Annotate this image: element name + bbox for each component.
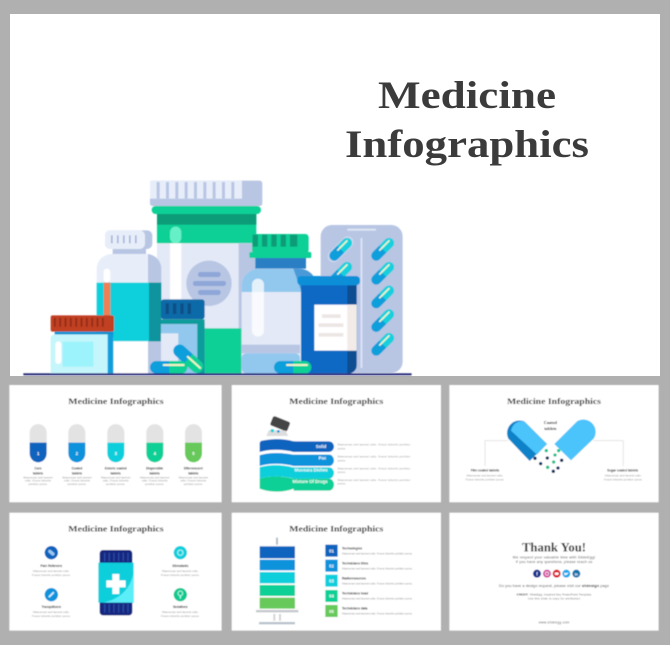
social icons xyxy=(533,570,580,578)
icon: medicine bottle with cross xyxy=(98,550,134,615)
feature captions xyxy=(32,564,200,618)
stack descriptions: purus. xyxy=(338,470,346,474)
icon: blister pack xyxy=(321,225,403,373)
icon: small blue jar xyxy=(161,299,205,373)
step 02: Technicians titles xyxy=(342,561,368,565)
right caption xyxy=(604,469,643,481)
step 01: 01 xyxy=(329,548,334,553)
step 04: Maecenas sed laoreet odio. Fusce lobortis porttitor purus. xyxy=(342,597,413,601)
message: We respect your valuable time with SlideEgg! xyxy=(513,555,595,559)
feature captions: Pain Relievers xyxy=(41,564,62,568)
icon: loose capsules xyxy=(150,342,311,375)
feature captions: Sedatives xyxy=(173,605,188,609)
icon: sedatives xyxy=(174,588,187,601)
stack descriptions: purus. xyxy=(338,482,346,486)
icon: syringe xyxy=(256,538,298,624)
capsule 2: 2 xyxy=(76,451,79,456)
feature captions: Maecenas sed laoreet odio. xyxy=(162,569,199,573)
capsule label: Coated xyxy=(544,420,558,425)
step 05 xyxy=(325,605,413,617)
icon: stimulants xyxy=(174,546,187,559)
connector lines xyxy=(485,441,623,466)
step 01: Technologies xyxy=(342,546,362,550)
left caption: Maecenas sed laoreet odio. xyxy=(467,474,503,478)
panel: stacked bottle slide xyxy=(232,385,441,502)
capsule 1: 1 xyxy=(37,451,40,456)
capsule captions: Dispersible xyxy=(146,467,163,471)
social icons: in xyxy=(575,572,578,576)
stack: dark blue layer: Solid xyxy=(316,444,327,449)
icon: red lid jar xyxy=(51,315,114,373)
step 02: 02 xyxy=(329,563,334,568)
icon: teal bottle xyxy=(97,230,161,373)
panel: cover slide xyxy=(10,14,660,376)
feature captions: Stimulants xyxy=(172,564,189,568)
step 05: Maecenas sed laoreet odio. Fusce lobortis porttitor purus. xyxy=(342,612,413,616)
capsule captions xyxy=(23,467,208,486)
capsule captions: tablets xyxy=(188,471,199,475)
icon: tranquilizers xyxy=(45,588,58,601)
message xyxy=(513,555,595,564)
stack descriptions: Maecenas sed laoreet odio. Fusce lobortis porttitor xyxy=(338,466,410,470)
icon: open bottle cap xyxy=(266,416,291,436)
step 03 xyxy=(325,575,413,587)
step 02: Maecenas sed laoreet odio. Fusce lobortis porttitor purus. xyxy=(342,567,413,571)
panel: opened capsule slide xyxy=(449,385,659,502)
capsule captions: Maecenas sed laoreet xyxy=(62,476,92,480)
capsule captions: tablets xyxy=(72,471,82,475)
capsule 4 xyxy=(146,424,163,462)
design request note: Do you have a design request, please visit our slidesign page xyxy=(499,584,609,588)
stack descriptions: Maecenas sed laoreet odio. Fusce lobortis porttitor xyxy=(338,443,410,447)
capsule captions: Effervescent xyxy=(184,467,204,471)
capsule captions: Maecenas sed laoreet xyxy=(23,476,53,480)
capsule captions: porttitor purus. xyxy=(145,482,164,486)
capsule captions: Core xyxy=(34,467,42,471)
capsule 5: 5 xyxy=(192,451,195,456)
step 03: Maecenas sed laoreet odio. Fusce lobortis porttitor purus. xyxy=(342,582,413,586)
step 04 xyxy=(325,590,413,602)
icon: dark blue pill bottle xyxy=(297,276,360,373)
copyright xyxy=(517,593,592,600)
thank you heading: Thank You! xyxy=(522,541,586,555)
stack: green layer: Mixture Of Drugs xyxy=(293,479,328,484)
left caption: Fusce lobortis porttitor purus. xyxy=(466,477,504,481)
capsule captions: odio. Fusce lobortis xyxy=(103,479,129,483)
capsule captions: porttitor purus. xyxy=(67,482,87,486)
medicine granules xyxy=(533,449,563,473)
stack descriptions: Maecenas sed laoreet odio. Fusce lobortis porttitor xyxy=(338,478,410,482)
feature captions: Fusce lobortis porttitor purus. xyxy=(161,614,200,618)
social icons: f xyxy=(536,571,538,576)
step 05: 05 xyxy=(329,609,334,614)
step 02 xyxy=(325,560,413,572)
right caption: Maecenas sed laoreet odio. xyxy=(605,474,642,478)
capsule captions: porttitor purus. xyxy=(106,482,125,486)
capsule captions: Enteric coated xyxy=(105,467,127,471)
capsule captions: odio. Fusce lobortis xyxy=(180,479,207,483)
copyright: CREDIT: SlideEgg, Inspired Key PowerPoint Template xyxy=(517,593,592,597)
capsule 5 xyxy=(185,424,202,462)
feature captions: Maecenas sed laoreet odio. xyxy=(33,610,70,614)
slide heading: Medicine Infographics xyxy=(507,396,602,406)
icon: capsule left half xyxy=(507,420,547,461)
shelf line xyxy=(23,373,412,375)
capsule captions: porttitor purus. xyxy=(28,482,48,486)
capsule captions: Coated xyxy=(72,467,82,471)
slide heading: Medicine Infographics xyxy=(68,524,164,534)
step 04: 04 xyxy=(329,594,334,599)
capsule captions: tablets xyxy=(150,471,160,475)
icon: large green bottle xyxy=(150,181,262,373)
panel: bottle with four features slide xyxy=(9,513,222,631)
slide heading: Medicine Infographics xyxy=(289,396,384,406)
icon: pain relievers xyxy=(45,546,58,559)
capsule captions: Maecenas sed laoreet xyxy=(101,476,131,480)
capsule 4: 4 xyxy=(154,451,157,456)
step 01 xyxy=(325,545,413,557)
title: Infographics xyxy=(345,123,589,166)
capsule captions: tablets xyxy=(33,471,43,475)
capsule captions: tablets xyxy=(111,471,121,475)
stack descriptions: Maecenas sed laoreet odio. Fusce lobortis porttitor xyxy=(338,454,410,458)
left caption xyxy=(466,469,504,481)
title xyxy=(345,74,589,166)
feature captions: Fusce lobortis porttitor purus. xyxy=(32,614,71,618)
illustration: medicine bottles xyxy=(23,181,412,375)
step 03: 03 xyxy=(329,579,334,584)
capsule label xyxy=(544,420,558,431)
capsule 3: 3 xyxy=(115,451,118,456)
stack: blue layer: Pac xyxy=(319,456,327,461)
stack: cyan layer: Mucoara Dishes xyxy=(294,467,328,472)
capsule 1 xyxy=(30,424,47,462)
capsule captions: Maecenas sed laoreet xyxy=(179,476,208,480)
capsule captions: odio. Fusce lobortis xyxy=(25,479,51,483)
feature captions: Fusce lobortis porttitor purus. xyxy=(161,573,200,577)
feature captions: Maecenas sed laoreet odio. xyxy=(33,569,70,573)
stack descriptions: purus. xyxy=(338,458,346,462)
left caption: Film coated tablets xyxy=(471,469,500,473)
stack descriptions xyxy=(338,443,410,486)
stack: green layer xyxy=(260,476,334,492)
capsule label: tablets xyxy=(544,426,557,431)
title: Medicine xyxy=(378,74,556,117)
feature captions: Tranquilizers xyxy=(42,605,61,609)
step 01: Maecenas sed laoreet odio. Fusce lobortis porttitor purus. xyxy=(342,552,413,556)
panel: syringe slide xyxy=(232,513,441,631)
icon: capsule right half xyxy=(554,420,596,460)
copyright: Use this slide to copy for attribution xyxy=(528,596,580,600)
stack: cyan layer xyxy=(260,465,334,479)
capsule captions: odio. Fusce lobortis xyxy=(64,479,90,483)
slide heading: Medicine Infographics xyxy=(68,396,164,406)
message: If you have any questions, please reach us xyxy=(516,560,592,564)
stack: dark blue layer xyxy=(260,439,334,452)
panel: thank you slide xyxy=(449,513,659,631)
right caption: Fusce lobortis porttitor purus. xyxy=(604,477,643,481)
capsule captions: porttitor purus. xyxy=(184,482,203,486)
capsule captions: Maecenas sed laoreet xyxy=(140,476,169,480)
website: www.slideegg.com xyxy=(539,621,570,625)
icon: glass bottle with green cap xyxy=(242,234,317,373)
capsule captions: odio. Fusce lobortis xyxy=(142,479,168,483)
panel: capsule steps slide xyxy=(9,385,222,502)
capsule 2 xyxy=(68,424,85,462)
feature captions: Maecenas sed laoreet odio. xyxy=(162,610,199,614)
step 05: Technicians data xyxy=(342,606,368,610)
capsule 3 xyxy=(107,424,124,462)
right caption: Sugar coated tablets xyxy=(607,469,638,473)
slide heading: Medicine Infographics xyxy=(289,524,384,534)
stack: blue layer xyxy=(260,453,334,466)
feature captions: Fusce lobortis porttitor purus. xyxy=(32,573,71,577)
step 04: Technicians head xyxy=(342,591,368,595)
step 03: Radioresources xyxy=(342,576,366,580)
stack descriptions: purus. xyxy=(338,447,346,451)
